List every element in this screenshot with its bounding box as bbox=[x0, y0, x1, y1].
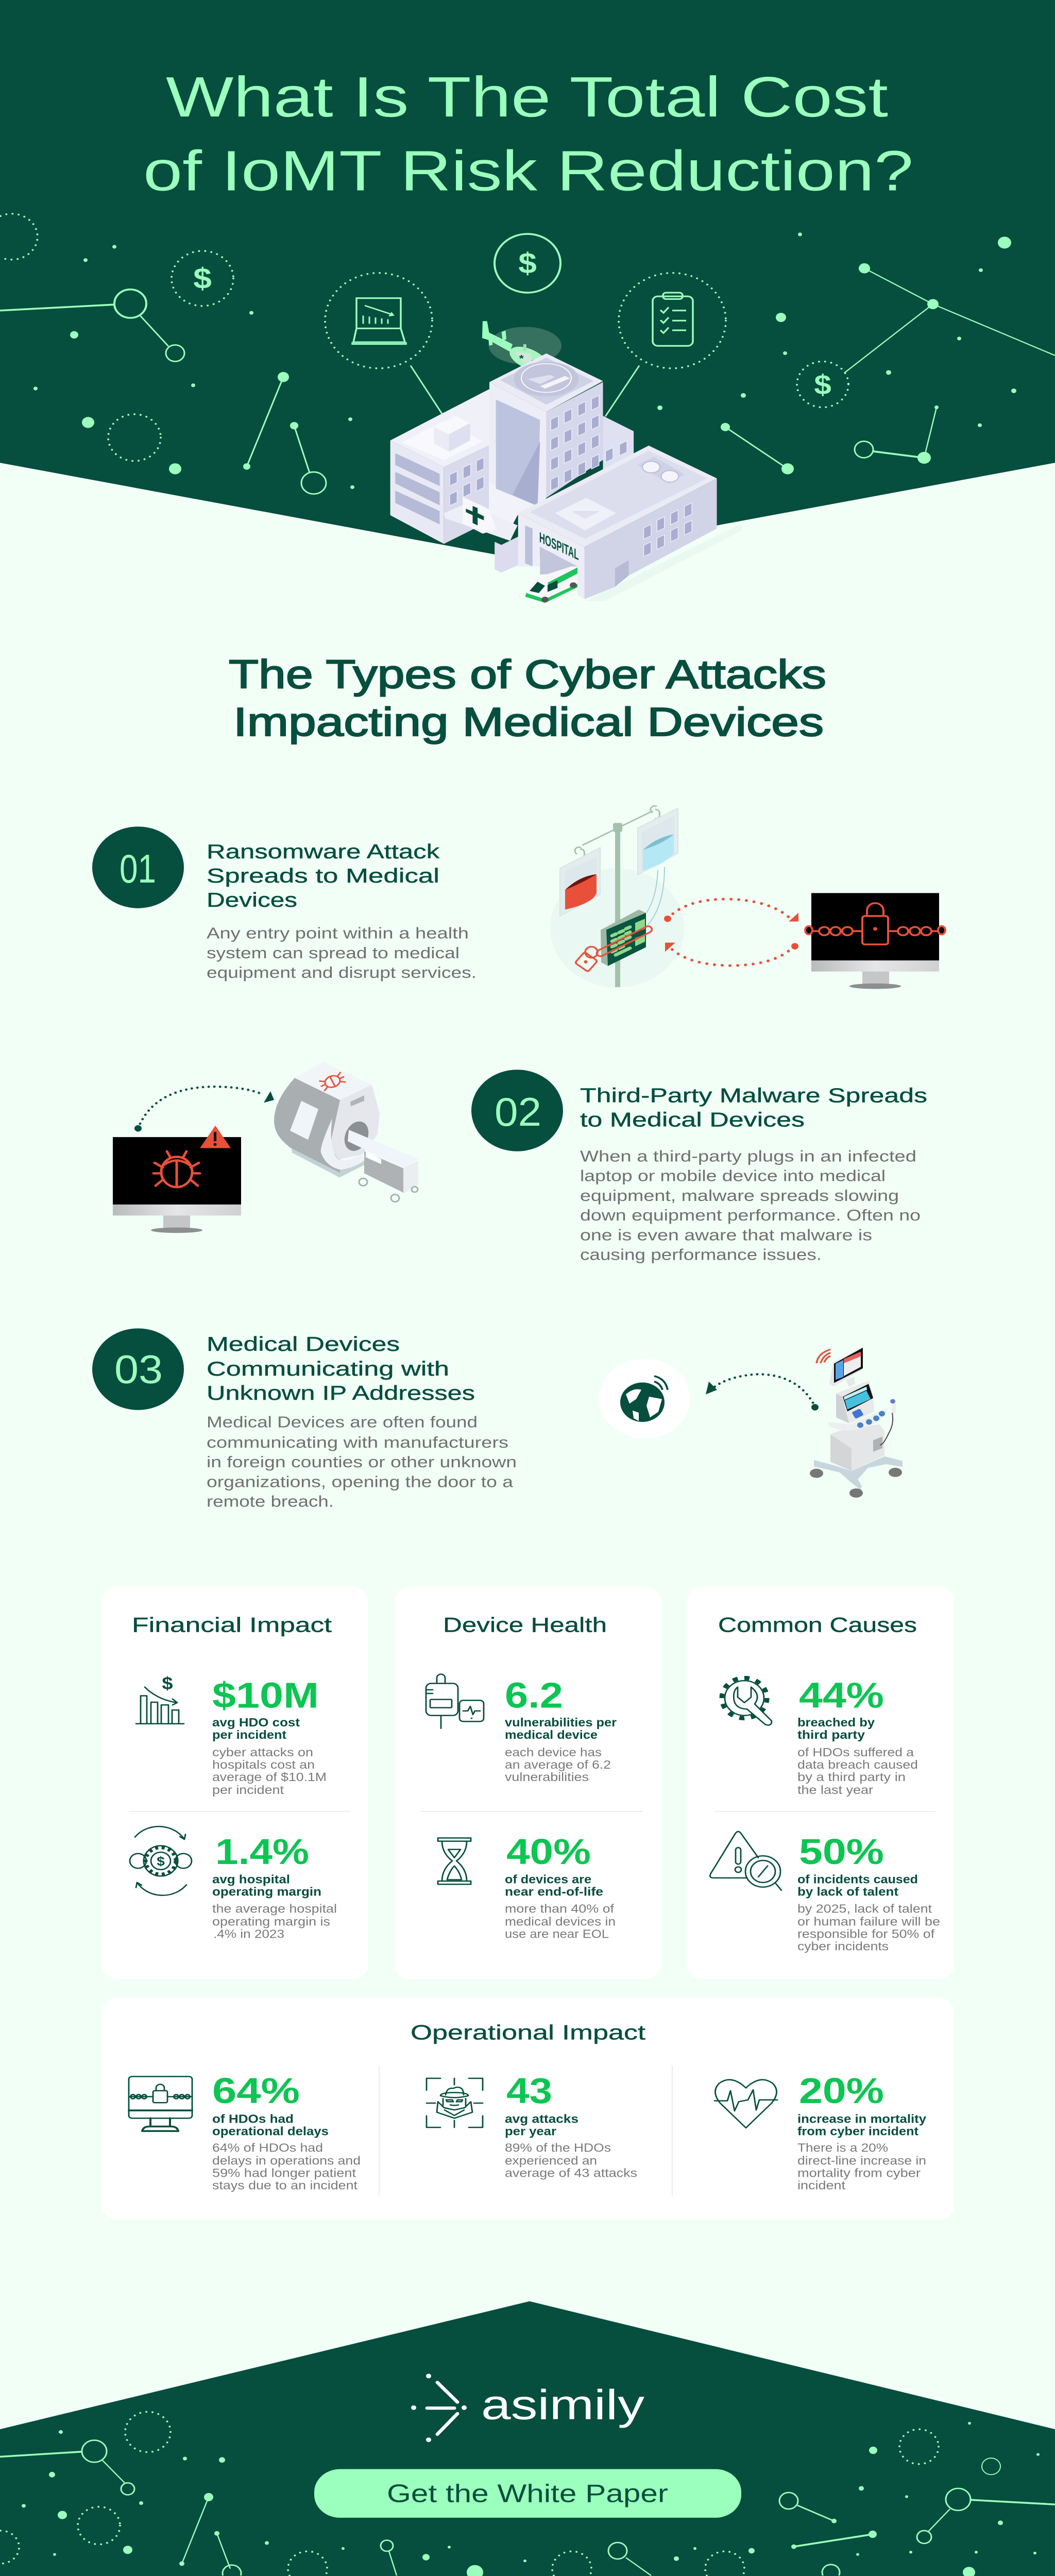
stat: 64%: 59% had longer patient bbox=[212, 2167, 356, 2180]
illustration: infected MRI bbox=[274, 1062, 418, 1202]
logo: asimily: asimily bbox=[481, 2381, 645, 2428]
stat: 44%: breached by bbox=[797, 1716, 875, 1730]
stat: 1.4%: operating margin is bbox=[212, 1916, 330, 1928]
attack 02 text: When a third-party plugs in an infected bbox=[580, 1147, 916, 1165]
attack 02 number: 02 bbox=[495, 1089, 541, 1134]
attack 02 text: down equipment performance. Often no bbox=[580, 1207, 921, 1224]
icon: locked monitor bbox=[805, 893, 945, 989]
stat: 43: 43 bbox=[506, 2071, 552, 2111]
icon: dollar circle center: $ bbox=[518, 247, 537, 280]
stat: 40%: 40% bbox=[506, 1832, 591, 1872]
title bbox=[143, 65, 913, 202]
attack 01 text: Devices bbox=[207, 888, 297, 911]
icon: gears with dollar: $ bbox=[157, 1854, 165, 1869]
attack 01 number: 01 bbox=[120, 846, 156, 891]
stat: 44%: 44% bbox=[799, 1675, 884, 1716]
panel: financial impact bbox=[101, 1587, 368, 1979]
stat: 64%: 64% of HDOs had bbox=[212, 2142, 323, 2155]
attack 02 text: one is even aware that malware is bbox=[580, 1226, 872, 1244]
attack 02 text: to Medical Devices bbox=[580, 1108, 805, 1131]
icon: globe with signal bbox=[599, 1358, 690, 1439]
stat: 6.2: an average of 6.2 bbox=[505, 1758, 611, 1772]
illustration: hospital bbox=[390, 321, 742, 603]
hero network decoration bbox=[0, 214, 1055, 494]
arrow: dark dotted arc to globe bbox=[706, 1374, 819, 1411]
stat: 6.2: vulnerabilities per bbox=[505, 1716, 617, 1730]
attack 03 number bbox=[92, 1328, 184, 1410]
tower bbox=[489, 382, 546, 507]
attack 03 text: in foreign counties or other unknown bbox=[207, 1453, 517, 1471]
attack 03 text: remote breach. bbox=[207, 1493, 334, 1510]
attack 02 text bbox=[580, 1084, 927, 1263]
stat: 43 bbox=[505, 2071, 637, 2180]
panel: common causes bbox=[687, 1587, 954, 1979]
attack 01 number bbox=[92, 826, 184, 908]
attack 03 text: Communicating with bbox=[207, 1357, 449, 1380]
stat: 64% bbox=[212, 2071, 361, 2192]
stat: 64%: delays in operations and bbox=[212, 2155, 361, 2167]
icon: hourglass bbox=[438, 1838, 471, 1884]
stat: 20%: 20% bbox=[799, 2071, 884, 2111]
section heading: The Types of Cyber Attacks bbox=[229, 652, 826, 697]
stat: 50% bbox=[797, 1832, 940, 1953]
icon: locked monitor outline bbox=[129, 2076, 192, 2131]
attack 02 text: Third-Party Malware Spreads bbox=[580, 1084, 927, 1107]
stat: $10M: avg HDO cost bbox=[212, 1716, 300, 1730]
stat: 20% bbox=[797, 2071, 926, 2192]
stat: 1.4%: the average hospital bbox=[212, 1903, 337, 1916]
helicopter: * bbox=[519, 353, 524, 364]
stat: 40%: of devices are bbox=[505, 1873, 591, 1886]
icon: gears with dollar bbox=[130, 1826, 192, 1895]
attack 03 text: Medical Devices are often found bbox=[207, 1413, 478, 1431]
illustration: infected IV pump bbox=[550, 806, 684, 988]
stat: 50%: by 2025, lack of talent bbox=[797, 1903, 932, 1916]
attack 01 text: Any entry point within a health bbox=[207, 924, 469, 942]
stat: 64%: 64% bbox=[212, 2071, 300, 2111]
logo: asimily bbox=[411, 2374, 645, 2442]
attack 03 text bbox=[207, 1332, 517, 1510]
stat: 44%: by a third party in bbox=[797, 1771, 906, 1784]
section heading bbox=[229, 652, 826, 744]
attack 02 text: equipment, malware spreads slowing bbox=[580, 1187, 899, 1204]
icon: clipboard checklist bbox=[619, 273, 726, 368]
stat: 40%: near end-of-life bbox=[505, 1886, 603, 1899]
icon: falling costs chart bbox=[136, 1673, 184, 1724]
stat: 6.2: each device has bbox=[505, 1746, 602, 1759]
panel: operational impact bbox=[101, 1997, 954, 2220]
button: get the white paper bbox=[314, 2469, 741, 2518]
stat: 1.4%: operating margin bbox=[212, 1886, 321, 1899]
stat: 6.2: 6.2 bbox=[505, 1675, 563, 1716]
stat: 1.4% bbox=[212, 1832, 337, 1941]
stat: 64%: operational delays bbox=[212, 2125, 329, 2138]
icon: bug monitor bbox=[113, 1126, 241, 1233]
hero light ground bbox=[0, 463, 1055, 569]
stat: 50%: 50% bbox=[799, 1832, 884, 1872]
icon: gear and wrench bbox=[722, 1678, 772, 1725]
icon: dollar circle left bbox=[172, 251, 233, 306]
stat: 6.2: vulnerabilities bbox=[505, 1771, 589, 1784]
hero background bbox=[0, 0, 1055, 561]
attack 03 text: Unknown IP Addresses bbox=[207, 1382, 475, 1404]
left block bbox=[390, 389, 500, 490]
icon: dollar circle right: $ bbox=[814, 370, 831, 400]
icon: heart with pulse bbox=[714, 2080, 777, 2128]
stat: 43: avg attacks bbox=[505, 2113, 578, 2126]
stat: 6.2: medical device bbox=[505, 1728, 598, 1742]
stat: 44% bbox=[797, 1675, 918, 1797]
stat: 20%: mortality from cyber bbox=[797, 2167, 921, 2180]
stat: 20%: from cyber incident bbox=[797, 2125, 918, 2138]
stat: $10M: cyber attacks on bbox=[212, 1746, 313, 1759]
stat: $10M: per incident bbox=[212, 1728, 286, 1742]
stat: 44%: the last year bbox=[797, 1784, 873, 1797]
illustration: hospital: HOSPITAL bbox=[539, 530, 579, 564]
icon: warning with magnifier bbox=[710, 1832, 781, 1890]
stat: 43: 89% of the HDOs bbox=[505, 2142, 611, 2155]
ambulance bbox=[525, 566, 577, 603]
attack 02 number bbox=[471, 1070, 563, 1151]
attack 01 text: Ransomware Attack bbox=[207, 840, 439, 862]
illustration: connected medical cart bbox=[810, 1348, 903, 1498]
stat: 64%: of HDOs had bbox=[212, 2113, 294, 2126]
stat: 1.4%: avg hospital bbox=[212, 1873, 290, 1886]
stat: 50%: or human failure will be bbox=[797, 1916, 940, 1928]
icon: hacker in target frame bbox=[427, 2078, 483, 2127]
stat: 40%: medical devices in bbox=[505, 1916, 616, 1928]
front block bbox=[518, 513, 585, 599]
stat: 43: per year bbox=[505, 2125, 556, 2138]
stat: $10M bbox=[212, 1675, 327, 1797]
stat: 40%: more than 40% of bbox=[505, 1903, 614, 1916]
stat: $10M: $10M bbox=[212, 1675, 319, 1716]
icon: falling costs chart: $ bbox=[162, 1673, 173, 1693]
canopy and sign bbox=[444, 503, 518, 541]
terrace bbox=[489, 446, 540, 530]
attack 03 number: 03 bbox=[114, 1347, 163, 1392]
heading: financial impact: Financial Impact bbox=[132, 1614, 332, 1637]
section heading: Impacting Medical Devices bbox=[233, 700, 824, 744]
attack 01 text: Spreads to Medical bbox=[207, 864, 439, 887]
icon: dollar circle left: $ bbox=[193, 262, 212, 295]
attack 01 text bbox=[207, 840, 477, 981]
stat: 44%: data breach caused bbox=[797, 1758, 918, 1772]
title: What Is The Total Cost bbox=[166, 65, 888, 129]
helicopter bbox=[482, 321, 561, 376]
heading: common causes: Common Causes bbox=[718, 1614, 917, 1637]
panel: device health bbox=[395, 1587, 661, 1979]
attack 02 text: laptop or mobile device into medical bbox=[580, 1167, 886, 1184]
arrows: red two-way dotted arcs bbox=[664, 899, 798, 965]
attack 01 text: system can spread to medical bbox=[207, 944, 460, 961]
icon: infusion pump bbox=[426, 1674, 484, 1728]
attack 03 text: communicating with manufacturers bbox=[207, 1434, 508, 1451]
stat: 1.4%: 1.4% bbox=[215, 1832, 309, 1872]
stat: $10M: per incident bbox=[212, 1784, 284, 1797]
stat: $10M: average of $10.1M bbox=[212, 1771, 327, 1784]
stat: 50%: responsible for 50% of bbox=[797, 1928, 934, 1941]
stat: 20%: incident bbox=[797, 2179, 845, 2192]
stat: 6.2 bbox=[505, 1675, 617, 1784]
icon: dollar circle center bbox=[495, 234, 560, 293]
attack 01 text: equipment and disrupt services. bbox=[207, 964, 477, 981]
button: get the white paper: Get the White Paper bbox=[387, 2480, 668, 2508]
title: of IoMT Risk Reduction? bbox=[143, 139, 913, 202]
stat: $10M: hospitals cost an bbox=[212, 1758, 315, 1772]
stat: 50%: of incidents caused bbox=[797, 1873, 918, 1886]
stat: 50%: by lack of talent bbox=[797, 1886, 898, 1899]
stat: 20%: There is a 20% bbox=[797, 2142, 888, 2155]
icon: dollar circle right bbox=[797, 362, 848, 408]
attack 03 text: organizations, opening the door to a bbox=[207, 1473, 513, 1490]
footer background bbox=[0, 2301, 1055, 2576]
stat: 43: average of 43 attacks bbox=[505, 2167, 637, 2180]
attack 03 text: Medical Devices bbox=[207, 1332, 400, 1355]
stat: 1.4%: .4% in 2023 bbox=[213, 1928, 284, 1941]
stat: 40% bbox=[505, 1832, 616, 1941]
icon: laptop with falling chart bbox=[325, 273, 432, 368]
heading: operational impact: Operational Impact bbox=[411, 2021, 645, 2044]
stat: 40%: use are near EOL bbox=[505, 1928, 609, 1941]
stat: 64%: stays due to an incident bbox=[212, 2179, 358, 2192]
footer network decoration bbox=[0, 2412, 1055, 2576]
attack 02 text: causing performance issues. bbox=[580, 1246, 822, 1263]
stat: 20%: direct-line increase in bbox=[797, 2155, 926, 2167]
stat: 44%: of HDOs suffered a bbox=[797, 1746, 914, 1759]
stat: 44%: third party bbox=[797, 1728, 865, 1742]
stat: 43: experienced an bbox=[505, 2155, 597, 2167]
arrow: dark dotted arc to MRI bbox=[134, 1087, 274, 1131]
stat: 50%: cyber incidents bbox=[797, 1940, 889, 1953]
stat: 20%: increase in mortality bbox=[797, 2113, 926, 2126]
right rear wing bbox=[603, 416, 634, 472]
heading: device health: Device Health bbox=[443, 1614, 607, 1637]
